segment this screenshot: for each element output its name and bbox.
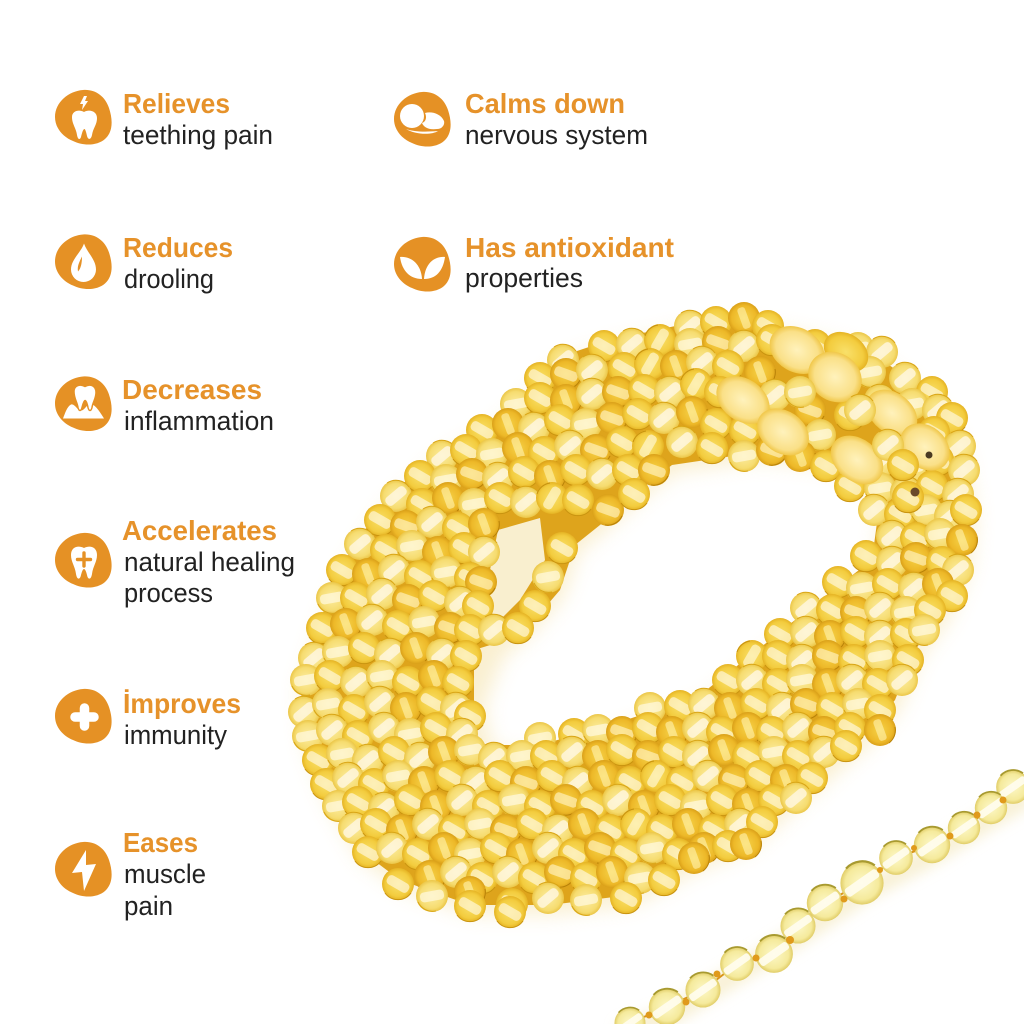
soft shadow under single strand (620, 795, 1024, 1024)
description: nervous system (465, 120, 648, 150)
description: process (124, 578, 213, 608)
benefit: calms down nervous system (394, 88, 648, 150)
description: immunity (124, 720, 227, 750)
single amber bead strand (612, 770, 1024, 1024)
icon: tooth in gum (55, 376, 112, 431)
benefit: eases muscle pain (55, 827, 206, 921)
heading: Decreases (122, 374, 262, 405)
description: pain (124, 891, 173, 921)
benefit: has antioxidant properties (394, 232, 674, 293)
benefit: improves immunity (55, 688, 241, 750)
description: inflammation (124, 406, 274, 436)
benefit: accelerates natural healing process (55, 515, 295, 608)
icon: tooth with plus (55, 533, 112, 588)
heading: İmproves (123, 688, 241, 719)
amber necklace pile (288, 302, 982, 928)
benefit: relieves teething pain (55, 88, 273, 150)
icon: lightning bolt (55, 842, 112, 897)
large carved oval beads (707, 316, 959, 513)
soft shadow under necklace pile (301, 325, 975, 914)
benefit: reduces drooling (55, 232, 233, 294)
description: teething pain (123, 120, 273, 150)
icon: two leaves (394, 237, 451, 292)
icon: sleeping baby (394, 92, 451, 147)
description: properties (465, 263, 583, 293)
heading: Relieves (123, 88, 230, 119)
description: muscle (124, 859, 206, 889)
heading: Eases (123, 827, 198, 858)
description (124, 547, 295, 608)
description: drooling (124, 264, 214, 294)
heading: Reduces (123, 232, 233, 263)
heading: Has antioxidant (465, 232, 674, 263)
icon: tooth with lightning bolt (55, 90, 112, 145)
icon: plus (55, 689, 112, 744)
heading: Accelerates (122, 515, 277, 546)
icon: water drop (55, 234, 112, 289)
description: natural healing (124, 547, 295, 577)
description (124, 859, 206, 921)
benefit: decreases inflammation (55, 374, 274, 436)
heading: Calms down (465, 88, 625, 119)
